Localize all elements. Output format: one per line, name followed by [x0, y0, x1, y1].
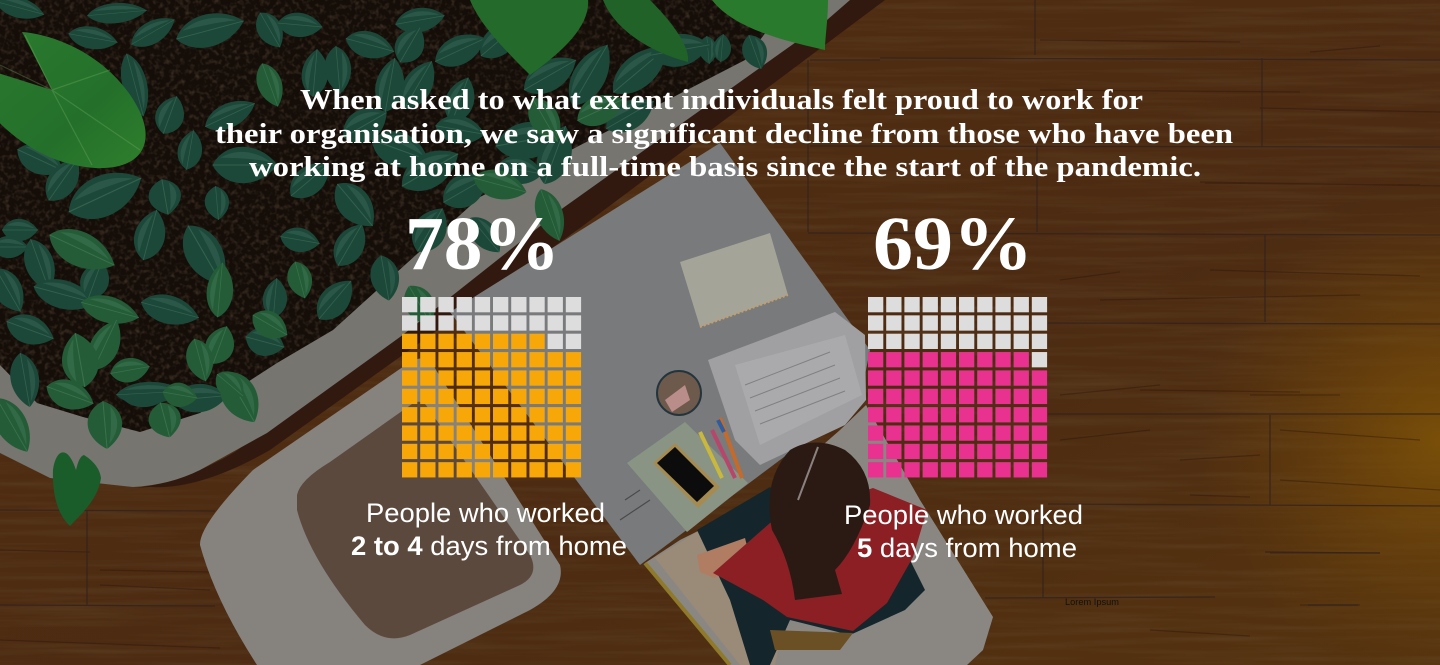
- headline: their organisation, we saw a significant decline from those who have been: [215, 119, 1233, 150]
- person: arm: [697, 538, 748, 578]
- planter soil: [0, 0, 790, 432]
- veins of large leaf: [0, 35, 140, 165]
- large heart-shaped leaf: [0, 32, 146, 168]
- headline: When asked to what extent individuals felt proud to work for: [300, 85, 1143, 116]
- waffle chart: 69 of 100 pink: [868, 297, 1047, 477]
- chair right: inner seat edge: [655, 530, 780, 665]
- chair left: shell: [200, 358, 561, 665]
- person: dark trousers: [697, 487, 925, 665]
- person: red shirt: [713, 488, 927, 631]
- stat: 69%: 69%: [873, 202, 1033, 286]
- caption: 5 days: People who worked: [844, 500, 1083, 530]
- person: hair parting: [798, 447, 818, 500]
- hanging heart leaf: [53, 452, 101, 526]
- card under phone: [627, 422, 748, 532]
- person: lower garment: [770, 630, 853, 650]
- coloured pens: [700, 418, 742, 478]
- top leaf one: [470, 0, 588, 75]
- planter foliage: [0, 0, 828, 526]
- top leaf two: [603, 0, 688, 62]
- caption: 5 days: 5 days from home: [857, 533, 1077, 563]
- caption: 2 to 4 days: People who worked: [366, 498, 605, 528]
- caption: 2 to 4 days: 2 to 4 days from home: [351, 531, 627, 561]
- waffle chart: 78 of 100 amber: [402, 297, 581, 477]
- caption: 5 days: [844, 500, 1083, 563]
- stat: 78%: 78%: [405, 202, 560, 286]
- headline: [215, 85, 1233, 183]
- spiral notebook: [680, 233, 788, 327]
- chair right: shell: [645, 405, 993, 665]
- person: hair: [769, 442, 870, 600]
- top leaf three: [712, 0, 828, 50]
- glass cup: [657, 371, 701, 415]
- small placeholder text: Lorem Ipsum: [1065, 597, 1119, 608]
- table marbling: [620, 490, 650, 520]
- chair right: gold trim: [645, 563, 730, 665]
- smartphone: [653, 443, 720, 508]
- planter edge: dark timber band: [133, 0, 885, 488]
- caption: 2 to 4 days: [351, 498, 627, 561]
- headline: working at home on a full-time basis since the start of the pandemic.: [249, 152, 1201, 183]
- planter rim: pale stone: [0, 0, 850, 487]
- chair left: seat cushion: [297, 402, 533, 638]
- marble table: [450, 143, 870, 565]
- soil texture: [0, 0, 800, 440]
- papers on table: [708, 312, 866, 465]
